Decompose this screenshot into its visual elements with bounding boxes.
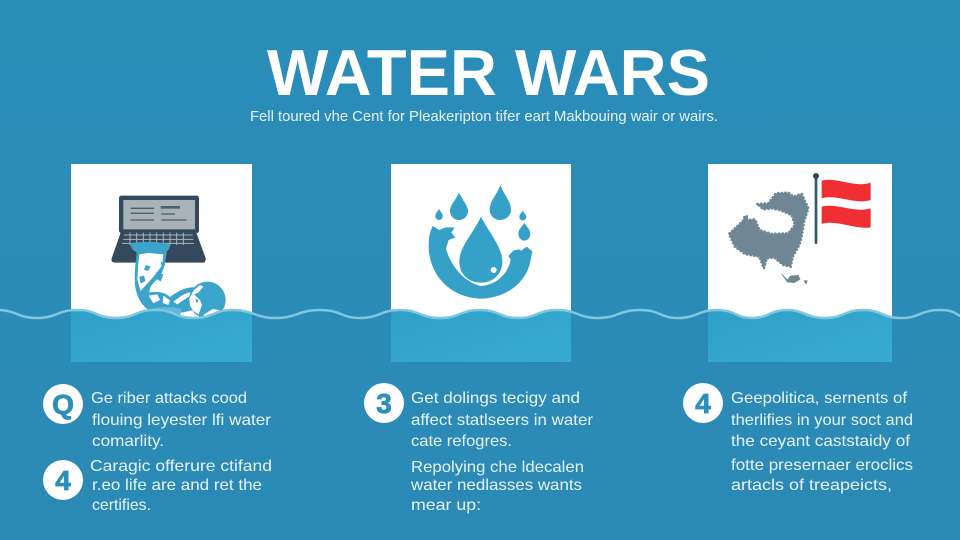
column 3 text xyxy=(683,383,913,494)
badge 4 xyxy=(683,383,723,423)
panel: cyber attacks xyxy=(71,164,252,362)
icon: laptop xyxy=(111,196,206,263)
text block: water needs: Repolying che ldecalen xyxy=(411,459,584,476)
column 2 text xyxy=(364,383,594,514)
text block: water needs: mear up: xyxy=(411,497,481,514)
text block: geopolitics: therlifies in your soct and xyxy=(731,412,913,429)
text block: critical infrastructure: certifies. xyxy=(92,497,151,514)
text block: critical infrastructure: r.eo life are and ret the xyxy=(92,477,262,494)
icon: water drops in broken pipe xyxy=(429,185,532,299)
water fill across panels xyxy=(71,311,892,362)
badge 4 xyxy=(43,460,83,500)
text block: cyber attacks: comarlity. xyxy=(92,433,164,450)
panel: broken pipe and drops xyxy=(391,164,571,362)
badge Q: Q xyxy=(52,389,74,420)
flag xyxy=(822,180,871,228)
icon: water stream and globe xyxy=(129,242,226,318)
text block: technology: affect statlseers in water xyxy=(411,412,594,429)
globe xyxy=(189,282,226,318)
small drops xyxy=(435,185,530,241)
wave line xyxy=(0,310,960,318)
badge 4: 4 xyxy=(695,388,711,419)
text block: cyber attacks: flouing leyester lfi water xyxy=(92,412,272,429)
flagpole xyxy=(813,173,819,244)
text block: critical infrastructure: Caragic offerure ctifand xyxy=(90,458,272,475)
badge Q xyxy=(43,384,83,424)
column 1 text xyxy=(43,384,272,514)
stream xyxy=(129,242,200,318)
badge 4: 4 xyxy=(55,465,71,496)
text block: technology: cate refogres. xyxy=(411,433,512,450)
map xyxy=(729,193,808,284)
badge 3: 3 xyxy=(376,388,392,419)
text block: geopolitics: the ceyant caststaidy of xyxy=(731,433,911,450)
text block: water needs: water nedlasses wants xyxy=(410,477,582,494)
drop highlight xyxy=(491,267,497,273)
text block: geopolitics: artacls of treapeicts, xyxy=(731,477,892,494)
icon: map and flag xyxy=(729,173,871,284)
broken pipe ring xyxy=(429,226,532,299)
title: WATER WARS xyxy=(267,36,710,109)
subtitle: Fell toured vhe Cent for Pleakeripton tifer eart Makbouing wair or wairs. xyxy=(250,109,718,125)
text block: geopolitics: Geepolitica, sernents of xyxy=(731,390,908,407)
main drop xyxy=(459,217,502,283)
panel: geopolitics map and flag xyxy=(708,164,892,362)
text block: cyber attacks: Ge riber attacks cood xyxy=(91,390,247,407)
badge 3 xyxy=(364,383,404,423)
text block: technology: Get dolings tecigy and xyxy=(411,390,580,407)
text block: geopolitics: fotte presernaer eroclics xyxy=(731,457,913,474)
